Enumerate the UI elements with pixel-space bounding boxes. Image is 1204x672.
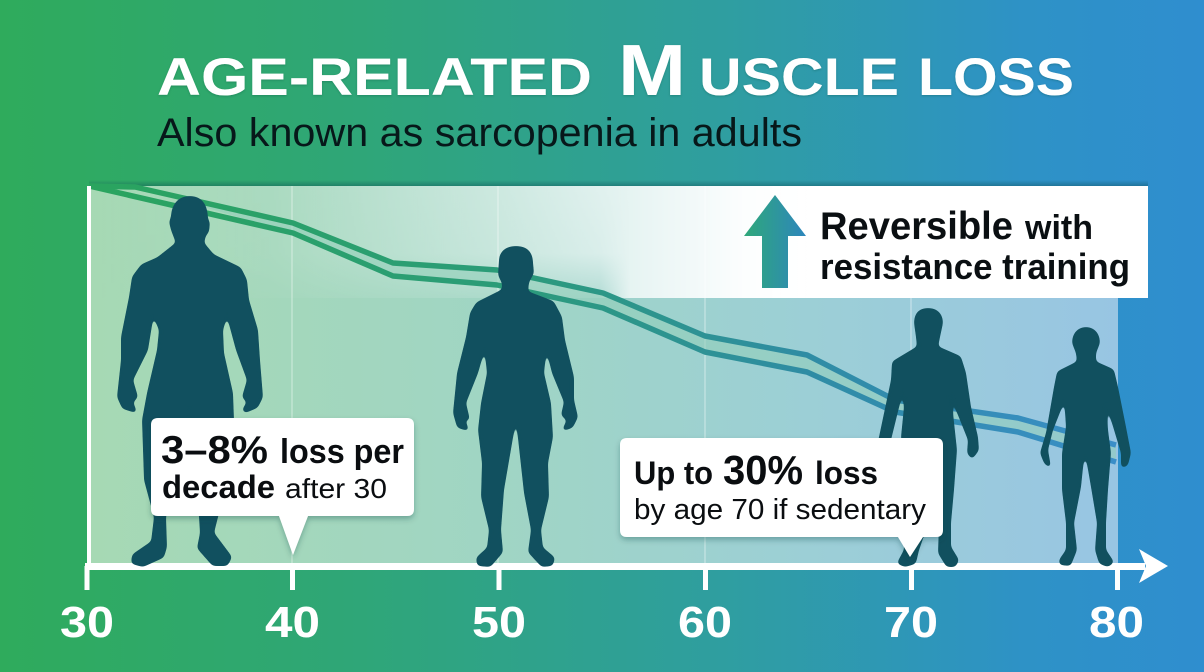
subtitle: Also known as sarcopenia in adults: [157, 111, 802, 155]
x axis age labels: 30: [60, 598, 114, 647]
panel background: [89, 186, 1118, 566]
callout text: decade: [162, 469, 275, 505]
x axis age labels: 50: [472, 598, 526, 647]
callout: up to 30% loss: [620, 438, 943, 557]
title: LOSS: [918, 48, 1074, 107]
panel top shadow: [89, 180, 1148, 186]
callout text: by age 70 if sedentary: [634, 494, 927, 526]
icon: up arrow: [744, 195, 806, 288]
reversible text: [820, 205, 1130, 287]
callout text: 3–8%: [161, 429, 268, 472]
x axis age labels: 70: [884, 598, 938, 647]
axes: [84, 186, 1168, 590]
reversible callout: [744, 195, 1130, 288]
muscle decline band: [89, 186, 1116, 462]
x axis ticks: [84, 566, 1120, 590]
silhouette: age 30s muscular man: [118, 197, 262, 566]
callout text: after 30: [285, 473, 387, 504]
y axis line: [87, 186, 91, 566]
callout: 3-8% loss per decade: [151, 418, 414, 555]
title: M: [618, 31, 686, 111]
callout text: [161, 429, 404, 505]
reversible text: resistance training: [820, 246, 1130, 287]
callout text: loss: [815, 455, 878, 491]
callout text: 30%: [723, 447, 803, 493]
x axis arrowhead: [1139, 549, 1168, 583]
title: AGE-RELATED: [157, 48, 592, 107]
x axis line: [85, 563, 1145, 570]
reversible text: Reversible: [820, 205, 1013, 248]
x axis age labels: [60, 598, 1144, 647]
callout text: loss per: [280, 433, 404, 471]
callout bubble: [151, 418, 414, 555]
white fading banner: [278, 186, 1148, 298]
x axis age labels: 40: [265, 598, 320, 647]
chart panel: [89, 180, 1148, 566]
title: USCLE: [699, 48, 899, 107]
silhouette: age 70 man: [872, 309, 978, 566]
callout text: [634, 447, 927, 526]
reversible text: with: [1024, 209, 1093, 247]
callout bubble: [620, 438, 943, 557]
callout text: Up to: [634, 455, 713, 491]
title: [157, 31, 1074, 111]
x axis age labels: 60: [678, 598, 732, 647]
x axis age labels: 80: [1089, 598, 1144, 647]
silhouette: age 50 man: [454, 247, 577, 566]
vertical grid lines: [292, 186, 911, 564]
silhouette: age 80 man: [1041, 328, 1130, 566]
